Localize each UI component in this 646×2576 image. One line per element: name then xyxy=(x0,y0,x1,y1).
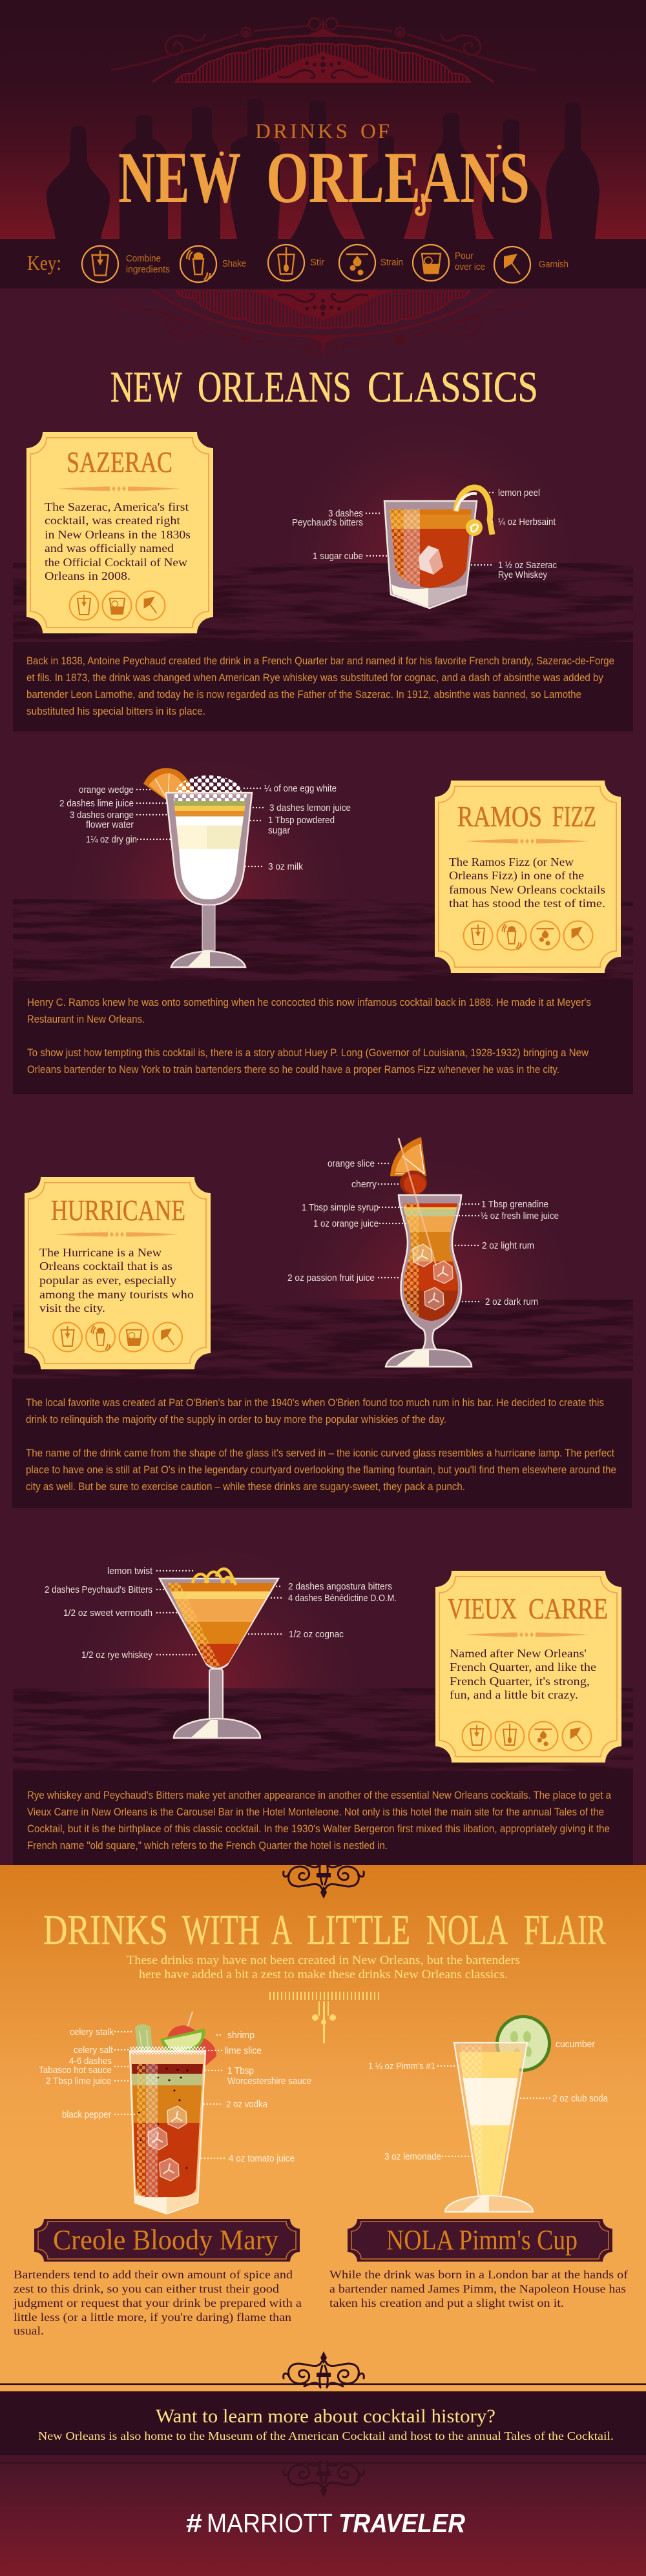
pimm's cup ingredient labels: 2 oz club soda xyxy=(552,2093,609,2104)
subtitle: drinks of xyxy=(255,120,390,143)
card: hurricane xyxy=(25,1177,211,1369)
card description: visit the city. xyxy=(39,1302,105,1314)
card description xyxy=(449,855,605,910)
pimm's cup glass illustration xyxy=(445,2015,551,2212)
title: new orleans: NEW xyxy=(118,138,241,218)
ramos fizz ingredient labels: orange wedge xyxy=(79,784,134,795)
callout text: New Orleans is also home to the Museum of the American Cocktail and host to the annual Tales of the Cocktail. xyxy=(38,2429,614,2442)
vieux carre ingredient labels: lemon twist xyxy=(107,1566,153,1577)
orange background xyxy=(0,1865,646,2391)
glow behind ramos fizz xyxy=(57,748,360,1051)
plaque: creole bloody mary: Creole Bloody Mary xyxy=(53,2224,278,2256)
logo: #marriott traveler: MARRIOTT xyxy=(207,2508,333,2538)
card description: popular as ever, especially xyxy=(39,1274,176,1287)
footer xyxy=(0,2455,646,2576)
pimm's cup description xyxy=(329,2268,628,2309)
card description: French Quarter, and like the xyxy=(450,1661,596,1673)
card description xyxy=(45,500,191,582)
wood texture xyxy=(13,563,633,642)
card: ramos fizz xyxy=(435,781,621,973)
pimm's cup ingredient labels: 1 ¼ oz Pimm's #1 xyxy=(368,2061,435,2072)
table surface xyxy=(13,899,633,981)
key: shake: Shake xyxy=(222,258,246,269)
card description: that has stood the test of time. xyxy=(449,897,605,910)
method icons xyxy=(53,1323,182,1351)
pimm's cup description: While the drink was born in a London bar at the hands of xyxy=(329,2268,628,2281)
logo: #marriott traveler xyxy=(186,2508,465,2538)
bottom ornament and rule xyxy=(0,2351,646,2387)
card title: VIEUX xyxy=(448,1593,517,1625)
key: garnish: Garnish xyxy=(539,259,568,270)
bloody mary ingredient labels: 4 oz tomato juice xyxy=(229,2153,295,2164)
sazerac glass illustration xyxy=(384,487,492,608)
card title: CARRE xyxy=(528,1593,608,1625)
heading: drinks with a little nola flair xyxy=(43,1906,606,1954)
table surface xyxy=(13,563,633,642)
bloody mary ingredient labels: 4-6 dashes xyxy=(69,2056,112,2067)
wood texture xyxy=(13,1300,633,1378)
pimm's cup ingredient labels: cucumber xyxy=(556,2039,595,2050)
glow behind hurricane xyxy=(280,1148,583,1451)
card description: Orleans Fizz) in one of the xyxy=(449,869,584,882)
card title: FIZZ xyxy=(552,801,596,833)
header panel xyxy=(0,0,646,239)
card title xyxy=(448,1593,608,1625)
hurricane ingredient labels: orange slice xyxy=(328,1158,375,1169)
sazerac ingredient labels: lemon peel xyxy=(498,487,540,498)
key: combine ingredients: ingredients xyxy=(126,264,170,275)
heading: drinks with a little nola flair: DRINKS xyxy=(43,1906,168,1954)
vieux carre glass illustration xyxy=(160,1569,278,1738)
pimm's cup description: a bartender named James Pimm, the Napoleon House has xyxy=(329,2282,626,2295)
bloody mary description: usual. xyxy=(14,2324,44,2337)
section intro text: These drinks may have not been created in New Orleans, but the bartenders xyxy=(127,1954,520,1967)
hurricane ingredient labels: ½ oz fresh lime juice xyxy=(481,1211,559,1222)
card: sazerac xyxy=(26,432,213,633)
bloody mary ingredient labels: Tabasco hot sauce xyxy=(39,2065,112,2076)
key: strain: Strain xyxy=(380,257,403,268)
bloody mary ingredient labels: celery stalk xyxy=(70,2027,114,2038)
card title: HURRICANE xyxy=(51,1194,185,1227)
plaque: nola pimm's cup xyxy=(348,2219,612,2262)
wood texture xyxy=(13,899,633,981)
wood texture xyxy=(13,1688,633,1771)
heading: drinks with a little nola flair: LITTLE xyxy=(307,1906,410,1954)
header gradient xyxy=(0,0,646,239)
hurricane history text: drink to relinquish the majority of the supply in order to buy more the popular whiskies of the day. xyxy=(26,1413,446,1426)
card description: among the many tourists who xyxy=(39,1288,194,1301)
vieux carre ingredient labels: 4 dashes Bénédictine D.O.M. xyxy=(288,1593,397,1604)
plaque: creole bloody mary xyxy=(34,2219,300,2262)
key background xyxy=(0,239,646,289)
panel: want to learn more xyxy=(0,2391,646,2455)
hurricane glass illustration xyxy=(386,1137,472,1367)
logo: #marriott traveler: TRAVELER xyxy=(339,2508,465,2538)
pimm's cup description: taken his creation and put a slight twist on it. xyxy=(329,2296,564,2309)
comb ornament xyxy=(269,1992,379,2043)
bloody mary glass illustration xyxy=(129,2012,216,2214)
vieux carre history text: French name "old square," which refers to the French Quarter the hotel is nestled in. xyxy=(27,1839,388,1852)
card description: cocktail, was created right xyxy=(45,514,180,527)
panel: sazerac xyxy=(13,408,633,731)
panel: ramos fizz xyxy=(13,748,633,1094)
vieux carre ingredient labels: 2 dashes Peychaud's Bitters xyxy=(45,1584,152,1595)
panel: vieux carre xyxy=(13,1537,633,1865)
heading: new orleans classics: ORLEANS xyxy=(198,362,351,411)
hurricane ingredient labels: 2 oz dark rum xyxy=(485,1296,538,1307)
sazerac ingredient labels: 1 ½ oz Sazerac xyxy=(498,560,557,571)
sazerac ingredient labels xyxy=(292,487,557,580)
section intro text xyxy=(127,1954,520,1981)
pimm's cup ingredient labels xyxy=(368,2039,609,2162)
vieux carre ingredient labels: 1/2 oz rye whiskey xyxy=(81,1650,152,1661)
hurricane ingredient labels: 2 oz passion fruit juice xyxy=(287,1273,375,1283)
hurricane ingredient labels xyxy=(287,1158,559,1307)
title: new orleans xyxy=(118,138,530,218)
ramos fizz history text: To show just how tempting this cocktail is, there is a story about Huey P. Long (Governor of Louisiana, 1928-1932) bringing a New xyxy=(27,1047,589,1059)
hurricane ingredient labels: 2 oz light rum xyxy=(482,1240,534,1251)
bloody mary ingredient labels: 2 oz vodka xyxy=(226,2099,268,2110)
key label: Key: xyxy=(27,251,61,274)
heading: new orleans classics: NEW xyxy=(110,362,183,411)
ramos fizz ingredient labels: 1¼ oz dry gin xyxy=(86,834,137,845)
vieux carre ingredient labels: 2 dashes angostura bitters xyxy=(288,1581,392,1592)
subtitle: drinks of: OF xyxy=(360,120,390,143)
title: new orleans: ORLEANS xyxy=(266,138,530,218)
bloody mary description xyxy=(13,2268,302,2337)
heading: drinks with a little nola flair: A xyxy=(271,1906,292,1954)
section intro text: here have added a bit a zest to make these drinks New Orleans classics. xyxy=(139,1968,508,1981)
ramos fizz ingredient labels: 2 dashes lime juice xyxy=(59,798,134,809)
bloody mary ingredient labels: 2 Tbsp lime juice xyxy=(46,2076,111,2087)
card description: The Ramos Fizz (or New xyxy=(449,855,574,868)
ramos fizz history text: Restaurant in New Orleans. xyxy=(27,1013,145,1025)
ramos fizz ingredient labels: ¼ of one egg white xyxy=(264,783,337,794)
hurricane history text: city as well. But be sure to exercise caution – while these drinks are sugary-sweet, they pack a punch. xyxy=(26,1480,465,1493)
ramos fizz ingredient labels: flower water xyxy=(86,819,134,830)
vieux carre history text xyxy=(13,1771,633,1865)
heading: drinks with a little nola flair: WITH xyxy=(182,1906,260,1954)
sazerac history text: substituted his special bitters in its place. xyxy=(26,705,205,717)
key: garnish xyxy=(494,247,568,283)
card description: Orleans cocktail that is as xyxy=(39,1260,172,1273)
key: stir xyxy=(268,245,324,281)
key: combine ingredients: Combine xyxy=(126,253,161,264)
hurricane ingredient labels: cherry xyxy=(351,1179,377,1190)
card description xyxy=(39,1246,194,1314)
glow behind vieux carre xyxy=(65,1537,369,1840)
card title: SAZERAC xyxy=(67,446,172,478)
method icons xyxy=(464,921,592,950)
subtitle: drinks of: DRINKS xyxy=(255,120,348,143)
card description: The Hurricane is a New xyxy=(39,1246,162,1259)
card description: French Quarter, it's strong, xyxy=(450,1675,590,1688)
bloody mary ingredient labels: celery salt xyxy=(74,2045,114,2056)
panel: hurricane xyxy=(12,1137,633,1508)
sazerac ingredient labels: 1 sugar cube xyxy=(313,551,363,562)
ramos fizz ingredient labels: 3 oz milk xyxy=(268,861,303,872)
header ornamental arch xyxy=(111,16,535,82)
ramos fizz ingredient labels: 3 dashes lemon juice xyxy=(269,802,351,813)
key: stir: Stir xyxy=(310,257,324,268)
ramos fizz ingredient labels xyxy=(59,783,351,872)
ramos fizz ingredient labels: sugar xyxy=(268,825,290,836)
ramos fizz history text: Orleans bartender to New York to train bartenders there so he could have a proper Ramos Fizz whenever he was in the city. xyxy=(27,1063,559,1076)
pimm's cup ingredient labels: 3 oz lemonade xyxy=(384,2151,441,2162)
vieux carre ingredient labels: 1/2 oz cognac xyxy=(289,1629,344,1640)
heading: drinks with a little nola flair: NOLA xyxy=(426,1906,508,1954)
sazerac history text: bartender Leon Lamothe, and today he is now regarded as the Father of the Sazerac. In 1912, absinthe was banned, so Lamothe xyxy=(26,688,581,700)
vieux carre ingredient labels: 1/2 oz sweet vermouth xyxy=(63,1608,152,1619)
ramos fizz glass illustration xyxy=(143,768,252,967)
vieux carre ingredient labels xyxy=(45,1566,397,1661)
key: pour over ice: Pour xyxy=(455,250,474,261)
bloody mary ingredient labels: black pepper xyxy=(62,2109,111,2120)
card description: and was officially named xyxy=(45,542,174,555)
mirrored ornament below key xyxy=(111,290,535,356)
key: shake xyxy=(180,246,246,282)
bloody mary description: Bartenders tend to add their own amount of spice and xyxy=(14,2268,293,2281)
card description xyxy=(450,1647,596,1701)
key: combine ingredients xyxy=(82,246,170,282)
heading: new orleans classics: CLASSICS xyxy=(368,362,538,411)
card title: RAMOS xyxy=(457,801,542,833)
card description: famous New Orleans cocktails xyxy=(449,883,605,896)
method icons xyxy=(70,591,165,620)
card description: Orleans in 2008. xyxy=(45,569,130,582)
bloody mary ingredient labels: 1 Tbsp xyxy=(227,2065,254,2076)
key band xyxy=(0,239,646,289)
sazerac ingredient labels: ¼ oz Herbsaint xyxy=(498,516,556,527)
plaque: nola pimm's cup: NOLA Pimm's Cup xyxy=(386,2224,578,2256)
hurricane history text xyxy=(12,1378,632,1508)
method icons xyxy=(463,1722,591,1750)
bloody mary description: zest to this drink, so you can either trust their good xyxy=(14,2282,279,2295)
table surface xyxy=(13,1688,633,1771)
bloody mary ingredient labels: lime slice xyxy=(225,2045,262,2056)
card: vieux carre xyxy=(435,1571,621,1763)
sazerac ingredient labels: Peychaud's bitters xyxy=(292,517,363,528)
sazerac ingredient labels: Rye Whiskey xyxy=(498,569,547,580)
bloody mary description: little less (or a little more, if you're daring) flame than xyxy=(14,2311,291,2324)
logo: #marriott traveler: # xyxy=(186,2508,202,2538)
panel: nola flair xyxy=(0,1863,646,2391)
sazerac history text xyxy=(13,642,633,731)
bloody mary ingredient labels: Worcestershire sauce xyxy=(227,2076,311,2087)
ramos fizz ingredient labels: 1 Tbsp powdered xyxy=(268,815,335,826)
glow behind sazerac xyxy=(275,408,585,718)
ramos fizz history text xyxy=(13,981,633,1094)
card description: The Sazerac, America's first xyxy=(45,500,189,513)
hurricane ingredient labels: 1 Tbsp simple syrup xyxy=(302,1202,379,1213)
footer ornament xyxy=(0,2461,646,2497)
hurricane ingredient labels: 1 oz orange juice xyxy=(313,1218,379,1229)
key: pour over ice xyxy=(413,245,485,281)
card description: Named after New Orleans' xyxy=(450,1647,587,1660)
bloody mary description: judgment or request that your drink be prepared with a xyxy=(13,2296,302,2309)
ramos fizz history text: Henry C. Ramos knew he was onto something when he concocted this now infamous cocktail back in 1888. He made it at Meyer's xyxy=(27,996,591,1008)
callout heading: Want to learn more about cocktail history? xyxy=(156,2406,495,2427)
bloody mary ingredient labels: shrimp xyxy=(227,2030,255,2041)
table surface xyxy=(13,1300,633,1378)
card description: the Official Cocktail of New xyxy=(45,556,187,569)
key: pour over ice: over ice xyxy=(455,261,485,272)
bloody mary ingredient labels xyxy=(39,2027,311,2164)
card description: fun, and a little bit crazy. xyxy=(450,1688,578,1701)
top ornament xyxy=(284,1863,364,1899)
ramos fizz ingredient labels: 3 dashes orange xyxy=(70,810,134,821)
bottle silhouettes xyxy=(47,99,599,239)
key: strain xyxy=(339,245,403,281)
heading: new orleans classics xyxy=(110,362,538,411)
hurricane ingredient labels: 1 Tbsp grenadine xyxy=(481,1199,548,1210)
heading: drinks with a little nola flair: FLAIR xyxy=(524,1906,606,1954)
card description: in New Orleans in the 1830s xyxy=(45,528,191,541)
sazerac ingredient labels: 3 dashes xyxy=(328,508,363,519)
